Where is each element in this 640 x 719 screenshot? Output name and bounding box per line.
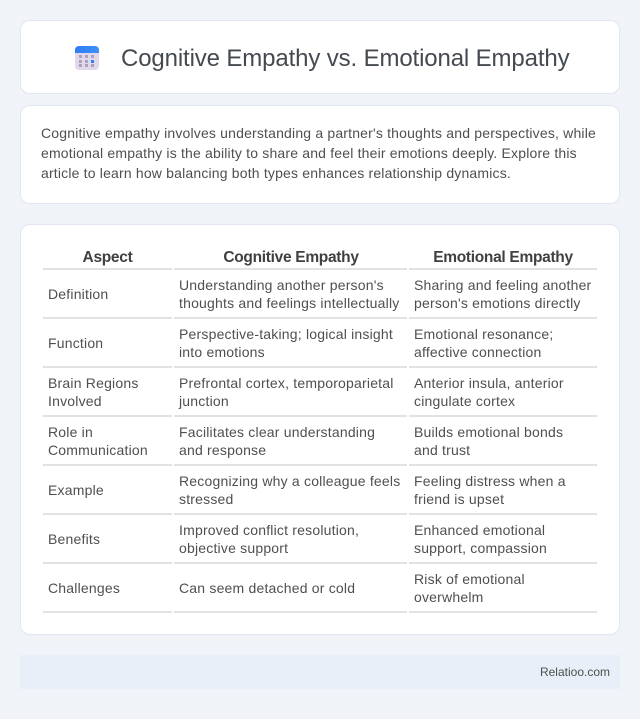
row: example: Recognizing why a colleague feels: [179, 473, 400, 489]
row: definition: thoughts and feelings intellectually: [179, 295, 399, 311]
row: definition: Sharing and feeling another: [414, 277, 591, 293]
title card: [20, 20, 620, 94]
column headings: Cognitive Empathy: [223, 249, 359, 266]
row: function: [48, 326, 553, 360]
row: brain regions involved: cingulate cortex: [414, 393, 515, 409]
row: challenges: Challenges: [48, 580, 120, 596]
row: brain regions involved: [48, 375, 564, 409]
row: function: Function: [48, 335, 103, 351]
row: benefits: Improved conflict resolution,: [179, 522, 359, 538]
row: function: Perspective-taking; logical insight: [179, 326, 393, 342]
row: role in communication: Role in: [48, 424, 93, 440]
title: Cognitive Empathy vs. Emotional Empathy: [121, 45, 569, 72]
row: example: [48, 473, 566, 507]
intro text: emotional empathy is the ability to share and feel their emotions deeply. Explore this: [41, 145, 577, 161]
row: role in communication: and response: [179, 442, 266, 458]
row: example: Feeling distress when a: [414, 473, 566, 489]
row: challenges: Can seem detached or cold: [179, 580, 355, 596]
row: brain regions involved: Anterior insula, anterior: [414, 375, 564, 391]
row: role in communication: [48, 424, 563, 458]
row: benefits: objective support: [179, 540, 288, 556]
row: function: Emotional resonance;: [414, 326, 553, 342]
icon: calendar: [75, 46, 99, 70]
row: challenges: [48, 571, 525, 605]
row: benefits: [48, 522, 547, 556]
row: function: affective connection: [414, 344, 542, 360]
row: brain regions involved: Brain Regions: [48, 375, 139, 391]
column headings: Emotional Empathy: [433, 249, 573, 266]
row: example: friend is upset: [414, 491, 504, 507]
row: brain regions involved: junction: [179, 393, 229, 409]
footer bar: [20, 655, 620, 689]
row: example: Example: [48, 482, 104, 498]
intro panel: [20, 105, 620, 204]
row: challenges: overwhelm: [414, 589, 484, 605]
row: function: into emotions: [179, 344, 265, 360]
row: definition: [48, 277, 591, 311]
row: role in communication: Builds emotional bonds: [414, 424, 563, 440]
row: example: stressed: [179, 491, 234, 507]
row: definition: Understanding another person's: [179, 277, 384, 293]
row: brain regions involved: Prefrontal cortex, temporoparietal: [179, 375, 394, 391]
intro text: [41, 125, 596, 181]
row: brain regions involved: Involved: [48, 393, 102, 409]
row: challenges: Risk of emotional: [414, 571, 525, 587]
row: role in communication: Facilitates clear understanding: [179, 424, 375, 440]
row: role in communication: Communication: [48, 442, 148, 458]
column headings: Aspect: [83, 249, 132, 266]
column headings: [82, 249, 573, 266]
row: benefits: Benefits: [48, 531, 100, 547]
row: definition: Definition: [48, 286, 108, 302]
intro text: Cognitive empathy involves understanding a partner's thoughts and perspectives, while: [41, 125, 596, 141]
intro text: article to learn how balancing both types enhances relationship dynamics.: [41, 165, 511, 181]
footer credit: Relatioo.com: [540, 665, 610, 679]
row: benefits: Enhanced emotional: [414, 522, 545, 538]
row: definition: person's emotions directly: [414, 295, 581, 311]
row: benefits: support, compassion: [414, 540, 547, 556]
row: role in communication: and trust: [414, 442, 470, 458]
comparison table panel: [20, 224, 620, 635]
